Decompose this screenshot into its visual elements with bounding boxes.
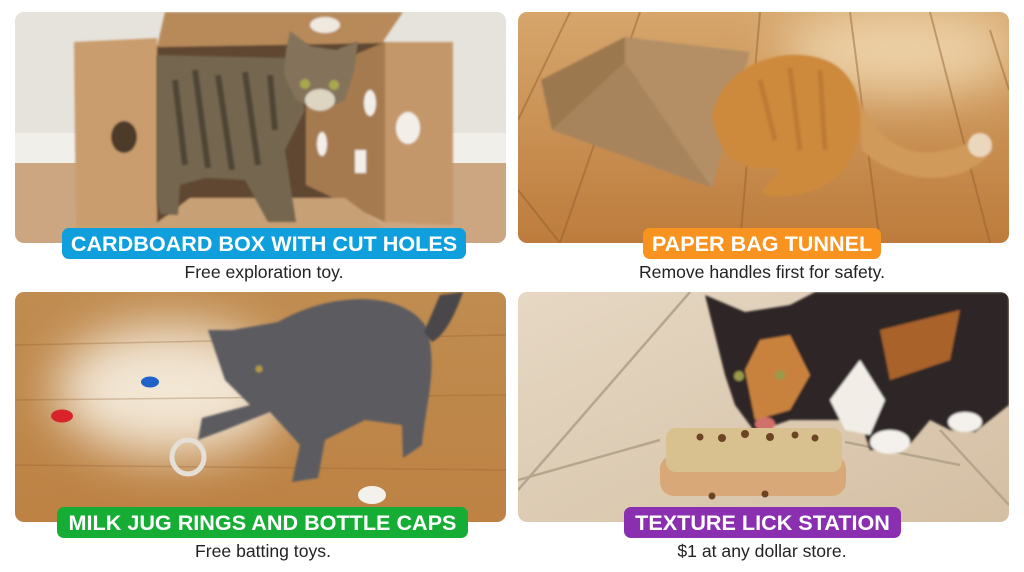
caption: paper bag: Remove handles first for safety. <box>639 262 885 282</box>
caption: cardboard box: Free exploration toy. <box>184 262 344 282</box>
icon: milk jug ring <box>172 440 204 474</box>
icon: wooden brush with treats <box>660 428 846 500</box>
panel: texture lick station photo <box>518 292 1009 522</box>
icon: gray cat batting <box>198 292 463 482</box>
icon: blue bottle cap <box>141 376 159 388</box>
icon: calico cat <box>705 292 1009 454</box>
heading: cardboard box: CARDBOARD BOX WITH CUT HOLES <box>71 231 457 256</box>
panel: cardboard box photo <box>15 12 506 243</box>
caption: milk jug rings: Free batting toys. <box>195 541 331 561</box>
icon: tabby cat in box <box>157 31 358 222</box>
caption: lick station: $1 at any dollar store. <box>677 541 847 561</box>
panel: paper bag photo <box>518 5 1020 243</box>
icon: orange cat entering bag <box>712 55 993 196</box>
icon: red bottle cap <box>51 410 73 422</box>
icon: brown paper bag <box>541 37 750 188</box>
icon: white bottle cap <box>358 486 386 504</box>
icon: open cardboard box <box>74 12 453 228</box>
heading: lick station: TEXTURE LICK STATION <box>635 510 890 535</box>
heading: paper bag: PAPER BAG TUNNEL <box>652 231 872 256</box>
panel: milk jug rings photo <box>15 292 506 522</box>
heading: milk jug rings: MILK JUG RINGS AND BOTTLE CAPS <box>69 510 456 535</box>
